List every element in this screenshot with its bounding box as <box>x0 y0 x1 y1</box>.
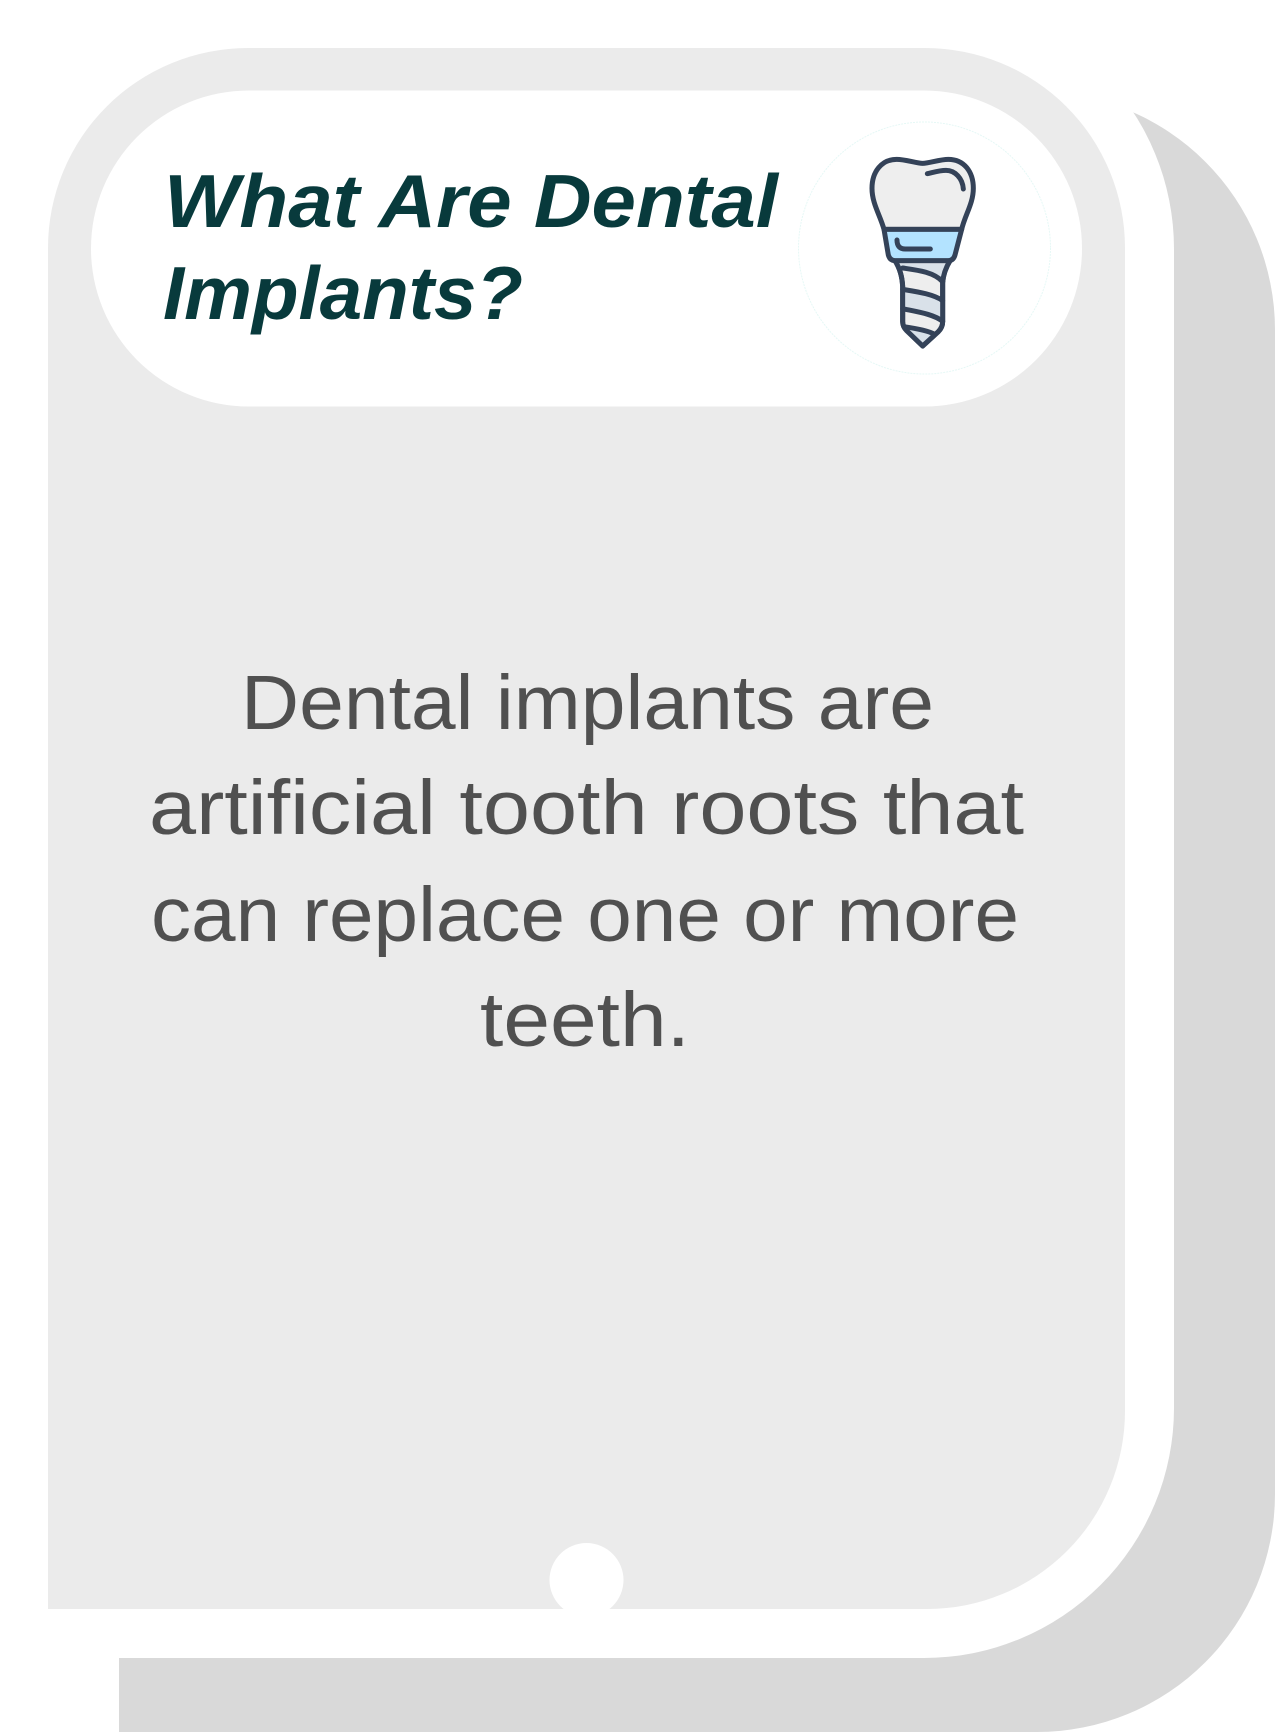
panel: white border lower left <box>0 1400 400 1658</box>
body text: can replace one or more <box>151 872 1019 958</box>
screw grey bands <box>898 263 947 282</box>
body text: Dental implants are <box>241 660 934 746</box>
abutment highlight <box>897 240 930 249</box>
heading pill <box>91 90 1082 406</box>
body text: artificial tooth roots that <box>149 765 1024 851</box>
body text <box>149 660 1024 1063</box>
body text: teeth. <box>480 977 690 1063</box>
screw threads <box>903 268 943 334</box>
screw outline <box>895 261 950 346</box>
white corner fill at lower left of border <box>0 1400 119 1732</box>
icon: dental implant <box>872 159 973 346</box>
notch circle at card bottom <box>550 1543 624 1617</box>
white strip below notch <box>540 1609 630 1629</box>
implant abutment <box>884 229 962 261</box>
title: Implants? <box>163 251 523 335</box>
implant screw <box>895 261 950 346</box>
crown highlight <box>927 170 963 189</box>
title <box>163 159 780 335</box>
title: What Are Dental <box>164 159 780 243</box>
implant crown <box>872 159 973 229</box>
panel: main grey card <box>48 48 1125 1609</box>
icon ring <box>798 122 1050 374</box>
